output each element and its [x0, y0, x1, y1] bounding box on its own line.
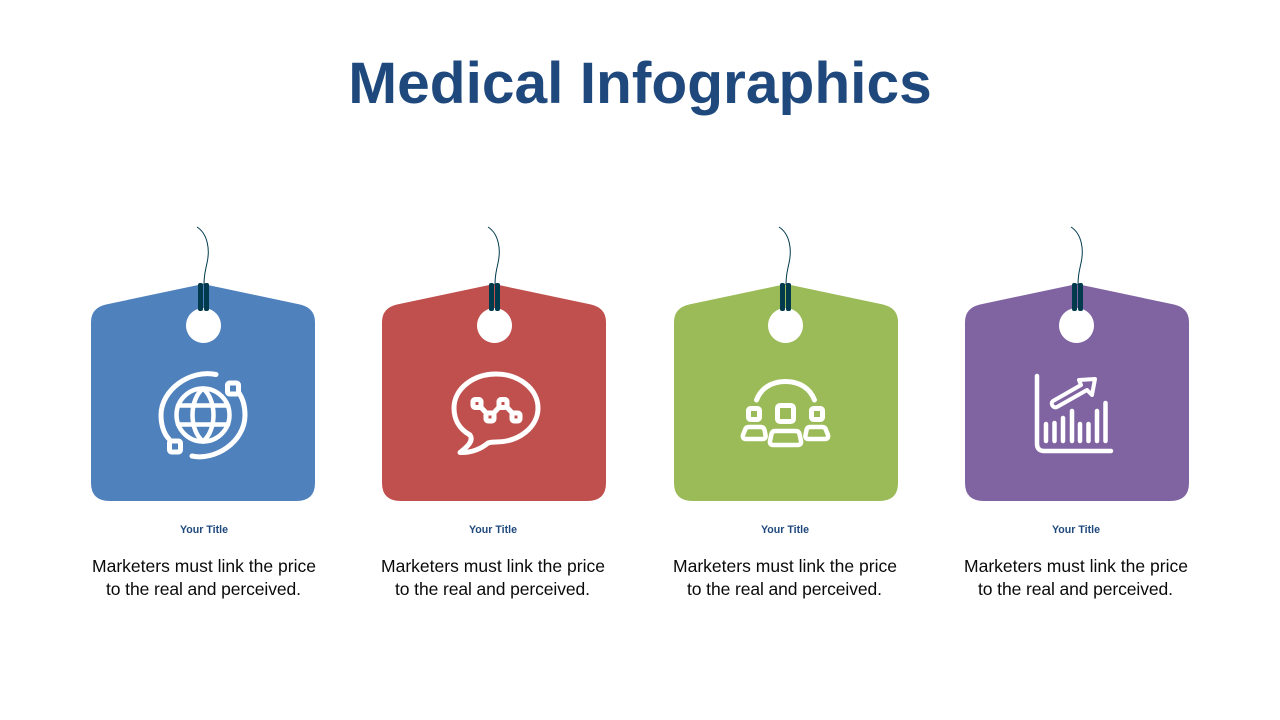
text block: green tag: Marketers must link the price [673, 556, 897, 576]
panel: purple tag [965, 227, 1189, 501]
panel: green tag [674, 227, 898, 501]
string and clip [197, 227, 209, 311]
text block: blue tag: Marketers must link the price [92, 556, 316, 576]
caption: purple tag title: Your Title [1052, 524, 1100, 536]
text block: purple tag: to the real and perceived. [978, 579, 1173, 599]
caption: red tag title: Your Title [469, 524, 517, 536]
tag shape [382, 284, 606, 501]
panel: blue tag [91, 227, 315, 501]
icon: rising bar chart with arrow [1037, 376, 1111, 451]
text block: red tag: Marketers must link the price [381, 556, 605, 576]
icon: globe with orbit [161, 374, 245, 457]
text block: purple tag: Marketers must link the price [964, 556, 1188, 576]
icon: speech bubble with nodes [454, 374, 538, 453]
tag shape [674, 284, 898, 501]
title: Medical Infographics [348, 51, 932, 116]
string and clip [779, 227, 791, 311]
caption: blue tag title: Your Title [180, 524, 228, 536]
caption: green tag title: Your Title [761, 524, 809, 536]
string and clip [488, 227, 500, 311]
tag shape [91, 284, 315, 501]
icon: group of people [743, 382, 828, 445]
text block: green tag: to the real and perceived. [687, 579, 882, 599]
string and clip [1071, 227, 1083, 311]
text block: red tag: to the real and perceived. [395, 579, 590, 599]
text block: blue tag: to the real and perceived. [106, 579, 301, 599]
tag shape [965, 284, 1189, 501]
panel: red tag [382, 227, 606, 501]
